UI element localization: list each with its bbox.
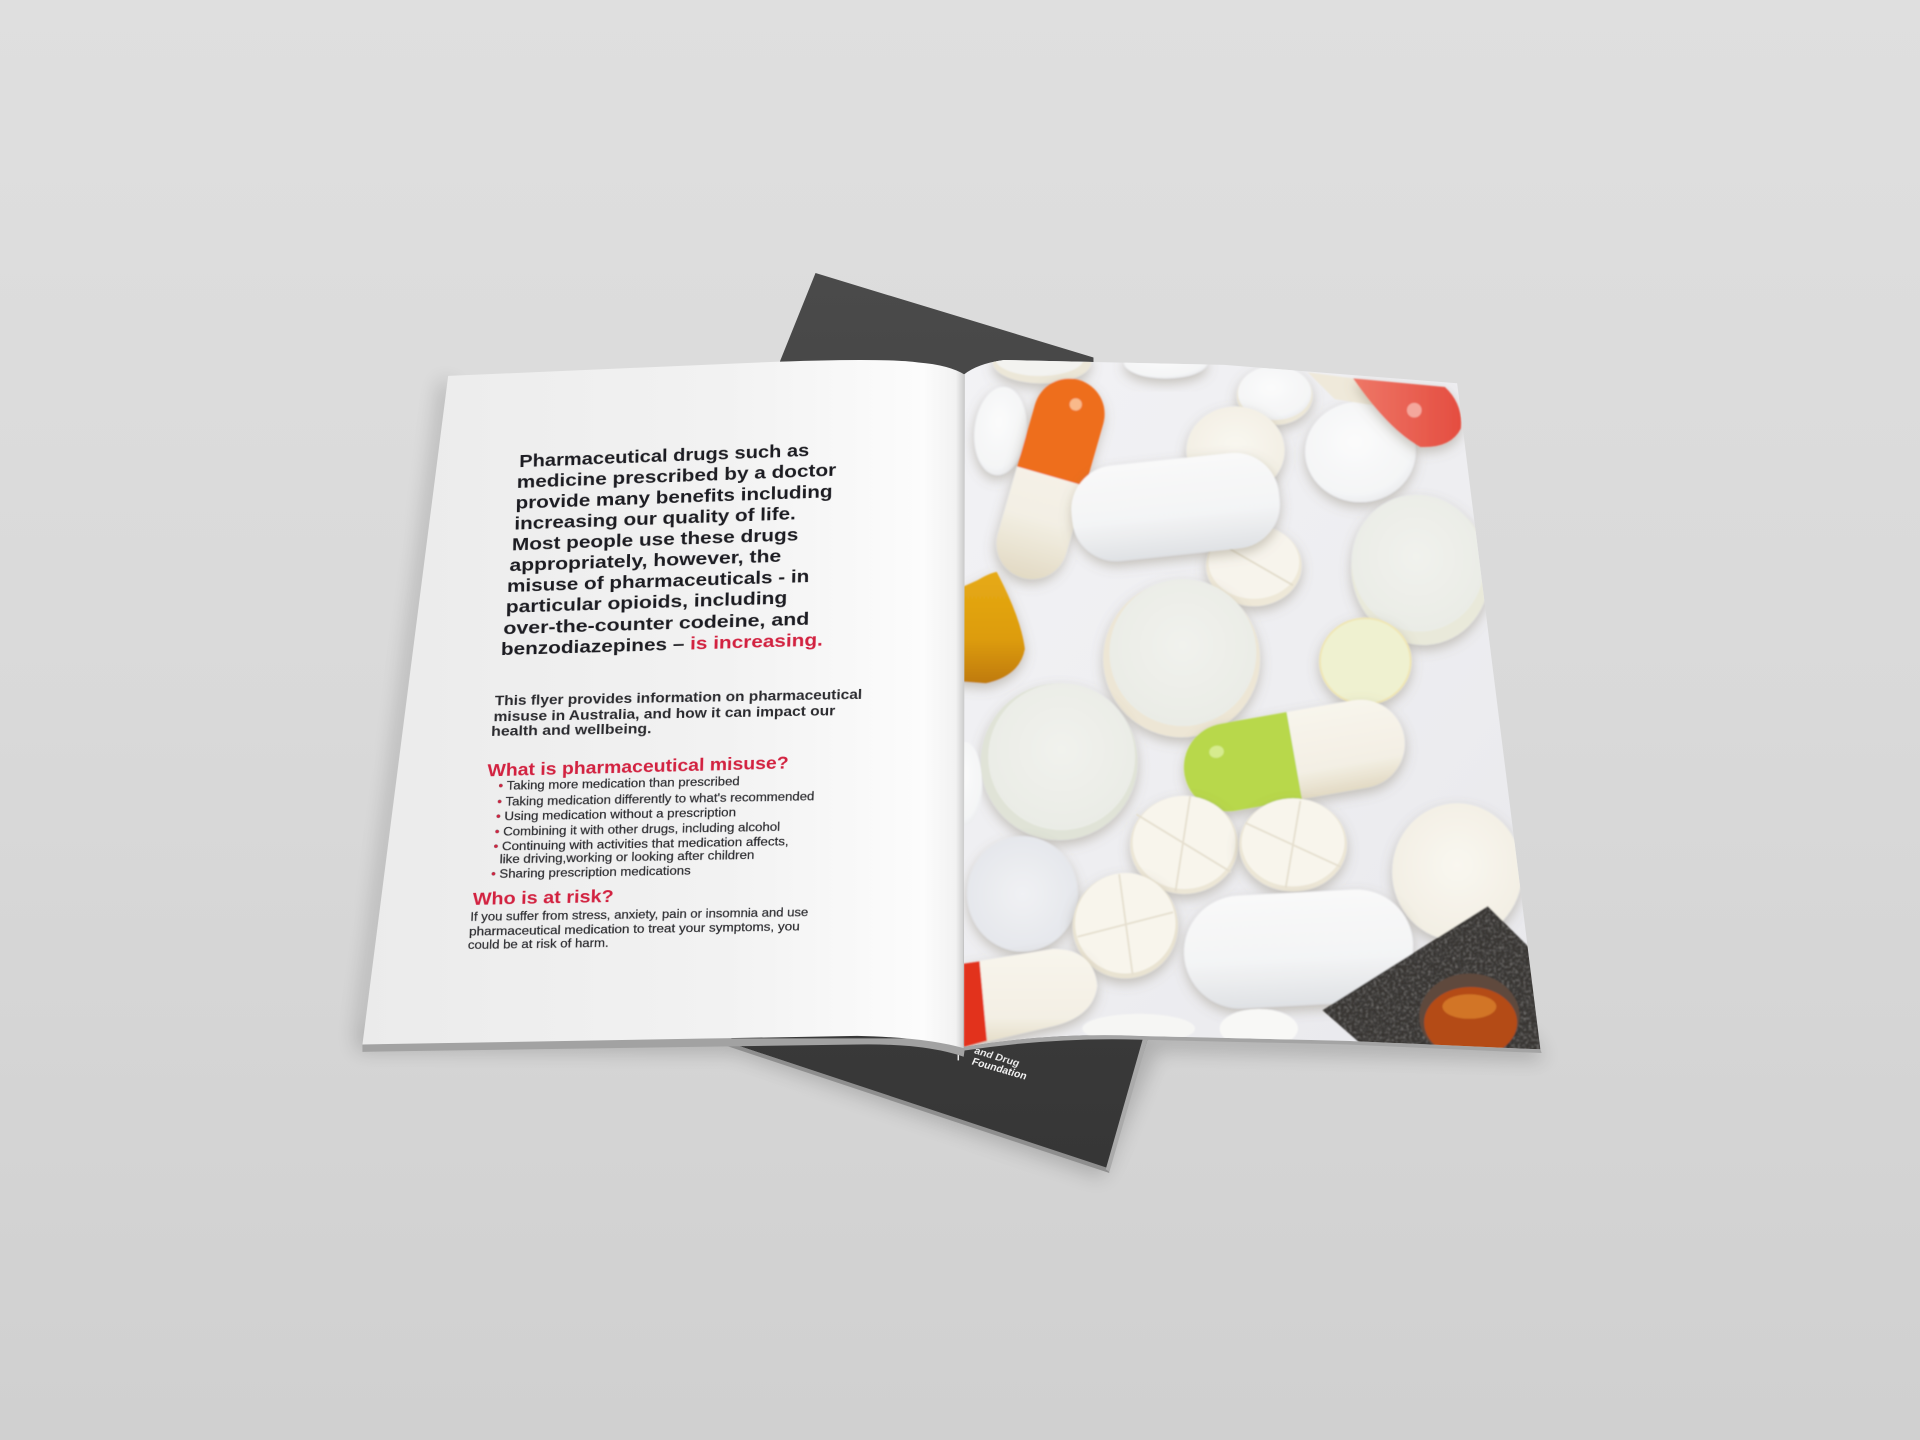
pills <box>948 342 1545 1059</box>
left page <box>362 360 965 1048</box>
pill: pale yellow <box>1320 618 1411 704</box>
pill: cream right <box>1392 803 1522 940</box>
pill: cream behind capsule <box>1187 407 1284 495</box>
misuse bullet list: like driving,working or looking after children <box>499 849 755 866</box>
capsule: amber <box>955 572 1025 683</box>
pill: cross scored left <box>1130 796 1238 894</box>
risk paragraph: If you suffer from stress, anxiety, pain or insomnia and use <box>470 906 809 924</box>
blister pack <box>1322 906 1545 1059</box>
cover page edge bottom <box>722 1043 1109 1173</box>
intro paragraph: Most people use these drugs <box>512 524 799 554</box>
intro paragraph: increasing our quality of life. <box>514 503 796 534</box>
flyer paragraph: health and wellbeing. <box>491 721 652 739</box>
misuse bullet list: • Using medication without a prescription <box>496 806 736 823</box>
blister orange tablet <box>1423 986 1518 1048</box>
blister dome <box>1418 973 1520 1044</box>
pill: white round right <box>1305 402 1416 502</box>
flyer paragraph: This flyer provides information on pharmaceutical <box>495 687 862 708</box>
intro paragraph: particular opioids, including <box>506 588 787 617</box>
intro paragraph <box>501 440 836 659</box>
drop shadows under booklets <box>355 380 1545 1178</box>
blister highlight <box>1442 994 1496 1019</box>
pill: large pale left <box>981 683 1138 840</box>
logo text: Foundation: Foundation <box>970 1057 1028 1082</box>
capsule: green and cream <box>1177 693 1412 818</box>
pill: cross scored right <box>1239 798 1347 891</box>
flyer paragraph <box>491 687 862 739</box>
heading: what is pharmaceutical misuse: What is pharmaceutical misuse? <box>487 752 789 780</box>
pill: cross scored bottom <box>1073 873 1178 978</box>
logo divider <box>958 1048 959 1060</box>
misuse bullet list: • Taking more medication than prescribed <box>498 775 740 793</box>
flyer paragraph: misuse in Australia, and how it can impact our <box>493 703 836 724</box>
pill: top round <box>993 342 1091 383</box>
pills: bottom partials <box>1083 1008 1298 1040</box>
pill: top centre <box>1124 347 1207 378</box>
photo backdrop <box>955 349 1555 1059</box>
risk paragraph: pharmaceutical medication to treat your symptoms, you <box>469 920 800 939</box>
intro paragraph: over-the-counter codeine, and <box>503 609 810 638</box>
misuse bullet list <box>491 775 815 881</box>
misuse bullet list: • Combining it with other drugs, including alcohol <box>495 821 780 839</box>
intro paragraph: provide many benefits including <box>515 481 833 513</box>
capsule: orange and white <box>988 370 1113 587</box>
left page page-edge <box>362 1038 965 1057</box>
heading: who is at risk: Who is at risk? <box>473 886 614 909</box>
right page: pills photo <box>948 342 1555 1059</box>
pill: blue white round <box>967 836 1078 951</box>
blister backing <box>1322 906 1545 1053</box>
risk paragraph: could be at risk of harm. <box>468 937 609 952</box>
capsule: large white bottom <box>1181 887 1416 1011</box>
pill: top right small <box>1237 366 1313 425</box>
capsule: large white <box>1067 449 1284 565</box>
cover page edge right <box>1106 1036 1149 1172</box>
right page page-edge <box>964 1035 1542 1053</box>
back booklet with dark cover <box>722 273 1149 1173</box>
intro paragraph: Pharmaceutical drugs such as <box>519 440 810 471</box>
pill: scored half tablet <box>1206 525 1302 606</box>
intro paragraph: appropriately, however, the <box>509 546 781 575</box>
capsule: red tip cream <box>1308 372 1373 405</box>
misuse bullet list: • Taking medication differently to what's recommended <box>497 790 815 809</box>
logo text: and Drug: and Drug <box>972 1046 1021 1069</box>
intro paragraph: misuse of pharmaceuticals - in <box>507 566 810 596</box>
capsule: red <box>1353 378 1461 447</box>
blister foil grain <box>1322 906 1545 1053</box>
pill: spine partial <box>964 747 983 803</box>
intro paragraph: medicine prescribed by a doctor <box>517 460 836 492</box>
capsule: red and white <box>964 949 1097 1047</box>
risk paragraph <box>468 906 809 952</box>
intro paragraph: benzodiazepines – is increasing. <box>501 630 823 659</box>
pill: large pale centre <box>1103 579 1260 737</box>
cover logo <box>958 1046 1028 1082</box>
misuse bullet list: • Continuing with activities that medication affects, <box>493 835 789 853</box>
pill: large pale right <box>1346 495 1486 656</box>
misuse bullet list: • Sharing prescription medications <box>491 864 691 881</box>
pill: small oval <box>970 384 1031 478</box>
dark cover <box>731 273 1149 1169</box>
